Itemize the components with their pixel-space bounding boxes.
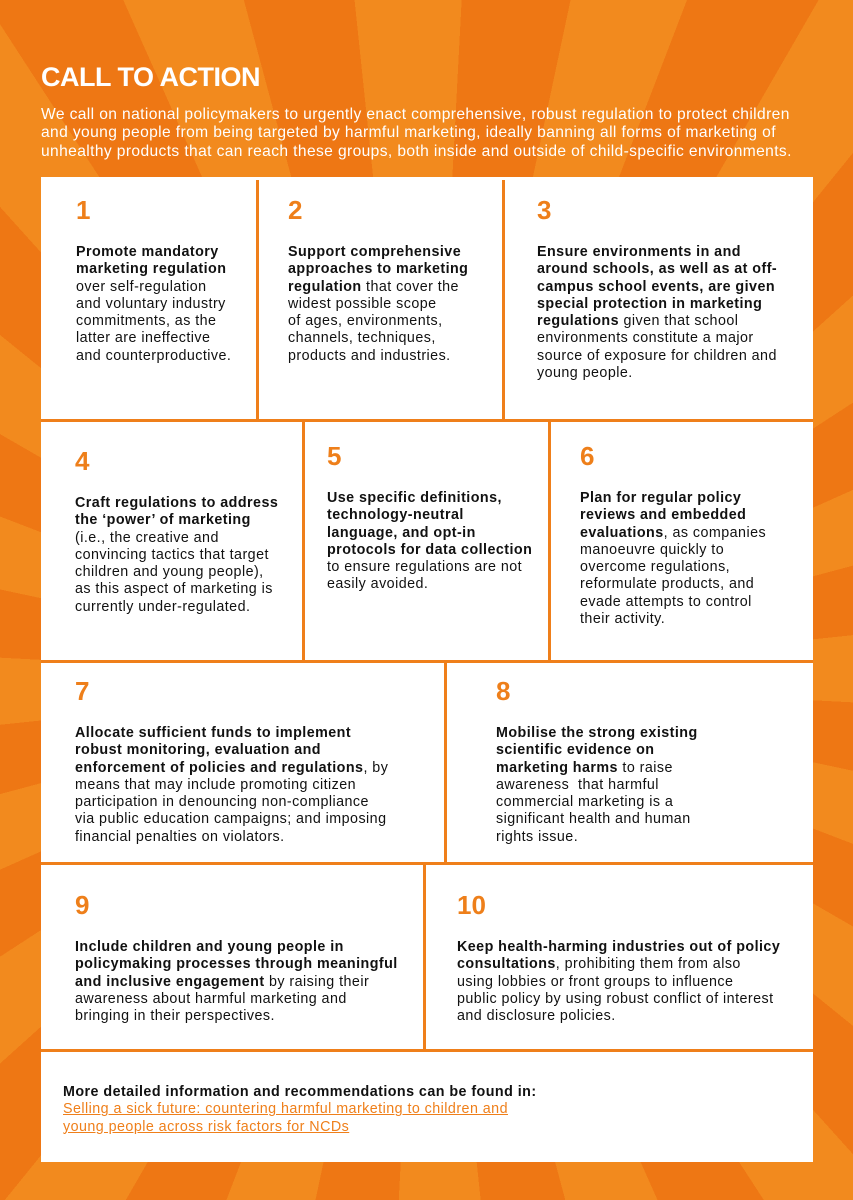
item 3: Ensure environments in and [537,244,741,260]
item 8: 8 [496,676,510,706]
item 8: commercial marketing is a [496,794,673,810]
intro text: We call on national policymakers to urgently enact comprehensive, robust regulation to protect children [41,106,790,123]
item 1 [76,195,231,364]
item 10: Keep health-harming industries out of policy [457,939,780,955]
item 3: environments constitute a major [537,330,754,346]
title: CALL TO ACTION [41,62,260,92]
item 6: overcome regulations, [580,559,730,575]
item 2: regulation that cover the [288,279,459,295]
item 10: public policy by using robust conflict of interest [457,991,774,1007]
item 4: (i.e., the creative and [75,530,219,546]
item 6: manoeuvre quickly to [580,542,724,558]
item 1: Promote mandatory [76,244,219,260]
item 6: Plan for regular policy [580,490,741,506]
item 3: regulations given that school [537,313,738,329]
item 5: 5 [327,441,341,471]
intro text: and young people from being targeted by harmful marketing, ideally banning all forms of marketing of [41,124,776,141]
item 9: 9 [75,890,89,920]
intro text: unhealthy products that can reach these groups, both inside and outside of child-specific environments. [41,143,792,160]
item 7: means that may include promoting citizen [75,777,356,793]
item 3: young people. [537,365,633,381]
item 6: evaluations, as companies [580,525,766,541]
item 2: widest possible scope [288,296,437,312]
item 4 [75,446,278,615]
item 9: policymaking processes through meaningful [75,956,398,972]
item 8: Mobilise the strong existing [496,725,698,741]
item 10: and disclosure policies. [457,1008,616,1024]
item 1: and counterproductive. [76,348,231,364]
item 8: marketing harms to raise [496,760,673,776]
panel: recommendations grid [41,177,813,1162]
item 4: as this aspect of marketing is [75,581,273,597]
item 1: over self-regulation [76,279,207,295]
item 7: robust monitoring, evaluation and [75,742,321,758]
item 2 [288,195,468,364]
item 6: their activity. [580,611,665,627]
item 3: campus school events, are given [537,279,775,295]
item 8: awareness that harmful [496,777,659,793]
footer reference: More detailed information and recommendations can be found in: [63,1084,537,1100]
item 2: channels, techniques, [288,330,436,346]
item 4: 4 [75,446,89,476]
item 2: 2 [288,195,302,225]
item 5: Use specific definitions, [327,490,502,506]
item 9: awareness about harmful marketing and [75,991,347,1007]
item 10: 10 [457,890,486,920]
item 5 [327,441,532,592]
item 1: 1 [76,195,90,225]
item 5: technology-neutral [327,507,464,523]
item 4: convincing tactics that target [75,547,269,563]
item 7: Allocate sufficient funds to implement [75,725,351,741]
item 3: around schools, as well as at off- [537,261,777,277]
intro text [41,106,792,160]
item 7: 7 [75,676,89,706]
item 1: and voluntary industry [76,296,226,312]
item 1: latter are ineffective [76,330,210,346]
item 2: approaches to marketing [288,261,468,277]
item 10 [457,890,780,1024]
item 8: rights issue. [496,829,578,845]
item 5: protocols for data collection [327,542,532,558]
item 3: source of exposure for children and [537,348,777,364]
item 9: bringing in their perspectives. [75,1008,275,1024]
item 3: special protection in marketing [537,296,762,312]
item 8: scientific evidence on [496,742,654,758]
item 7: financial penalties on violators. [75,829,285,845]
item 2: of ages, environments, [288,313,443,329]
item 3 [537,195,777,381]
item 2: Support comprehensive [288,244,461,260]
item 6: reviews and embedded [580,507,746,523]
item 6: evade attempts to control [580,594,752,610]
item 7 [75,676,388,845]
item 8: significant health and human [496,811,691,827]
item 7: participation in denouncing non-compliance [75,794,369,810]
item 4: Craft regulations to address [75,495,278,511]
item 7: via public education campaigns; and imposing [75,811,386,827]
item 1: commitments, as the [76,313,216,329]
item 7: enforcement of policies and regulations, by [75,760,388,776]
item 4: children and young people), [75,564,264,580]
item 1: marketing regulation [76,261,226,277]
item 5: language, and opt-in [327,525,476,541]
item 4: currently under-regulated. [75,599,250,615]
item 4: the ‘power’ of marketing [75,512,251,528]
item 6 [580,441,766,627]
item 9: Include children and young people in [75,939,344,955]
item 6: 6 [580,441,594,471]
item 8 [496,676,698,845]
footer reference: young people across risk factors for NCDs [63,1119,349,1135]
item 6: reformulate products, and [580,576,754,592]
item 10: consultations, prohibiting them from also [457,956,741,972]
item 2: products and industries. [288,348,451,364]
item 10: using lobbies or front groups to influence [457,974,733,990]
item 9 [75,890,398,1024]
footer reference: Selling a sick future: countering harmful marketing to children and [63,1101,508,1117]
item 5: to ensure regulations are not [327,559,522,575]
item 5: easily avoided. [327,576,428,592]
item 3: 3 [537,195,551,225]
footer reference [63,1084,537,1135]
item 9: and inclusive engagement by raising their [75,974,369,990]
